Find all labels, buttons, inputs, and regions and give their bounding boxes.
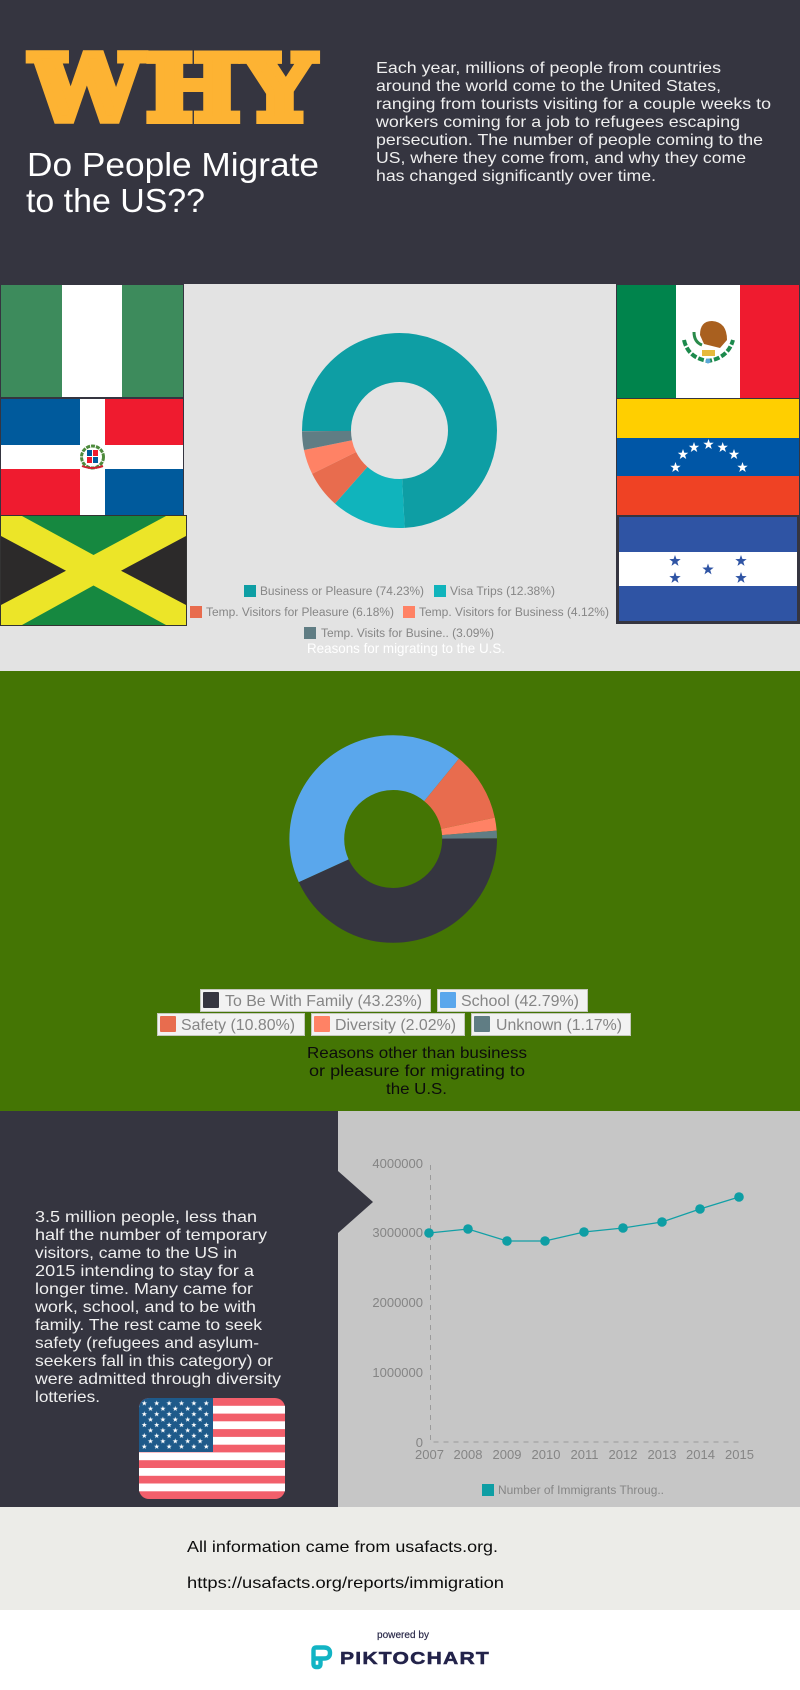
intro text block: ranging from tourists visiting for a couple weeks to [376,96,771,113]
x axis labels: 2008 [454,1447,482,1462]
legend: reasons for migrating: Business or Pleasure (74.23%) [260,586,424,598]
legend: other reasons: Safety (10.80%) [181,1017,295,1034]
panel: header [0,0,800,284]
x axis labels: 2011 [571,1447,598,1462]
x axis labels: 2009 [493,1447,521,1462]
chart caption: Reasons for migrating to the U.S. [307,640,505,656]
flag: Mexico [617,285,799,398]
y axis labels [372,1156,423,1450]
donut chart: other reasons [317,763,470,915]
paragraph: family. The rest came to seek [35,1317,263,1334]
x axis labels [415,1447,754,1462]
subtitle: Do People Migrate [27,146,319,183]
y axis labels: 4000000 [372,1156,423,1171]
chart caption: or pleasure for migrating to [309,1063,525,1080]
flags: left column [0,284,186,626]
flag: United States [139,1398,285,1499]
legend: reasons for migrating: Visa Trips (12.38%) [450,586,555,598]
legend: reasons for migrating: Temp. Visits for Busine.. (3.09%) [321,628,494,640]
chart caption: the U.S. [386,1081,447,1098]
paragraph: half the number of temporary [35,1227,267,1244]
flag: Dominican Republic [1,399,183,515]
chart caption [307,1045,527,1098]
flag: Jamaica [0,516,186,626]
flags: right column [616,284,800,624]
panel: immigration text [0,1111,373,1507]
x axis labels: 2010 [532,1447,560,1462]
intro text block [375,60,771,185]
source text: https://usafacts.org/reports/immigration [187,1575,504,1592]
paragraph [34,1209,281,1406]
legend: other reasons: Diversity (2.02%) [335,1017,456,1034]
wordmark: PIKTOCHART [340,1648,490,1668]
legend: other reasons [158,990,630,1036]
data line [424,1192,744,1246]
x axis labels: 2015 [725,1447,754,1462]
panel: line chart background [338,1111,800,1507]
legend: other reasons: Unknown (1.17%) [496,1017,622,1034]
paragraph: work, school, and to be with [34,1299,256,1316]
x axis labels: 2014 [686,1447,715,1462]
chart caption: Reasons other than business [307,1045,527,1062]
arrow [338,1171,373,1233]
y axis labels: 3000000 [372,1225,423,1240]
paragraph: longer time. Many came for [35,1281,254,1298]
paragraph: 3.5 million people, less than [35,1209,257,1226]
x axis labels: 2007 [415,1447,444,1462]
y axis labels: 0 [416,1435,423,1450]
paragraph: lotteries. [35,1389,100,1406]
intro text block: workers coming for a job to refugees escaping [375,114,740,131]
source text [187,1539,504,1592]
y axis labels: 2000000 [372,1295,423,1310]
legend: other reasons: School (42.79%) [461,993,579,1010]
source text: All information came from usafacts.org. [187,1539,498,1556]
donut chart: reasons for migrating [326,358,472,504]
paragraph: visitors, came to the US in [35,1245,237,1262]
footer: powered by Piktochart: powered by [377,1629,430,1641]
intro text block: Each year, millions of people from countries [376,60,721,77]
x axis labels: 2013 [648,1447,676,1462]
legend: reasons for migrating [190,585,609,640]
paragraph: seekers fall in this category) or [35,1353,274,1370]
paragraph: 2015 intending to stay for a [35,1263,254,1280]
paragraph: safety (refugees and asylum- [35,1335,259,1352]
panel: reasons for migrating [0,284,800,671]
flag: Venezuela [617,399,799,515]
flag: Honduras [619,517,797,621]
chart legend: Number of Immigrants Throug.. [498,1485,664,1497]
legend: reasons for migrating: Temp. Visitors for Pleasure (6.18%) [206,607,394,619]
intro text block: persecution. The number of people coming to the [376,132,763,149]
paragraph: were admitted through diversity [34,1371,281,1388]
legend: reasons for migrating: Temp. Visitors for Business (4.12%) [419,607,609,619]
footer: powered by Piktochart [314,1629,490,1668]
panel: reasons other than business or pleasure [0,671,800,1111]
intro text block: has changed significantly over time. [376,168,656,185]
panel: sources [0,1507,800,1610]
subtitle [26,146,319,219]
legend: other reasons: To Be With Family (43.23%) [225,993,422,1010]
y axis labels: 1000000 [372,1365,423,1380]
intro text block: around the world come to the United States, [376,78,721,95]
line chart: number of immigrants [372,1156,754,1497]
flag: Nigeria [1,285,183,397]
subtitle: to the US?? [26,182,205,219]
icon: Piktochart logo [314,1648,330,1667]
title: WHY: WHY [30,36,318,142]
intro text block: US, where they come from, and why they come [376,150,746,167]
x axis labels: 2012 [609,1447,637,1462]
